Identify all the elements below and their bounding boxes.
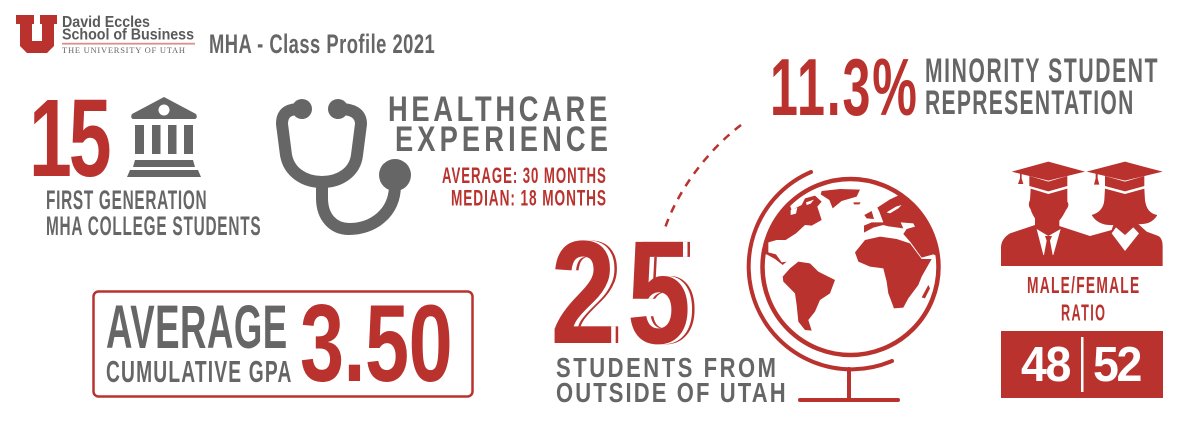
box outline	[94, 292, 472, 396]
label	[1027, 274, 1139, 325]
value 25 with offset outline: 5	[627, 210, 691, 374]
heading: HEALTHCARE	[388, 90, 607, 129]
arrow: dashed connector	[665, 125, 741, 228]
label: average: AVERAGE	[106, 292, 287, 361]
heading	[388, 90, 608, 159]
caption: MHA COLLEGE STUDENTS	[46, 211, 261, 241]
label: cumulative GPA: CUMULATIVE GPA	[106, 356, 291, 389]
icon: globe on stand	[749, 172, 950, 400]
icon: institution building	[127, 97, 201, 177]
label: RATIO	[1061, 299, 1105, 325]
ratio box: 52	[1093, 338, 1142, 392]
number 15: 15	[29, 78, 112, 200]
caption: OUTSIDE OF UTAH	[556, 378, 786, 409]
caption: FIRST GENERATION	[46, 185, 207, 215]
caption: STUDENTS FROM	[556, 353, 776, 384]
heading: EXPERIENCE	[395, 120, 608, 159]
value 25 with offset outline: 2	[550, 210, 616, 375]
icon: block U logo	[16, 15, 57, 53]
ratio box: 48	[1021, 338, 1071, 392]
logo wordmark: School of Business	[62, 27, 194, 44]
value 25 with offset outline: 5	[632, 210, 695, 374]
logo wordmark	[62, 15, 195, 55]
label: MALE/FEMALE	[1027, 274, 1139, 299]
value 25 with offset outline: 5	[634, 210, 698, 374]
page title: MHA - Class Profile 2021	[209, 28, 435, 59]
panel: average GPA	[94, 282, 472, 405]
continents	[766, 189, 936, 331]
logo wordmark: THE UNIVERSITY OF UTAH	[62, 45, 185, 55]
header: logo and title	[16, 15, 435, 59]
average and median months: MEDIAN: 18 MONTHS	[451, 185, 606, 210]
logo wordmark: David Eccles	[62, 15, 150, 31]
caption	[46, 185, 261, 241]
value 25 with offset outline: 2	[558, 210, 623, 375]
value 3.50: 3.50	[300, 282, 453, 405]
average and median months: AVERAGE: 30 MONTHS	[442, 164, 606, 188]
panel: healthcare experience	[282, 90, 608, 229]
label: MINORITY STUDENT	[925, 51, 1158, 89]
icon: stethoscope	[282, 99, 411, 229]
panel: students from outside Utah	[550, 172, 950, 409]
panel: male/female ratio	[1001, 162, 1163, 398]
caption	[556, 353, 786, 409]
ratio box	[1001, 331, 1163, 398]
label	[925, 51, 1158, 121]
panel: minority representation	[770, 43, 1158, 133]
value 25 with offset outline: 2	[555, 210, 620, 375]
average and median months	[442, 164, 606, 210]
panel: first generation students	[29, 78, 261, 241]
icon: male and female graduates	[1001, 162, 1163, 266]
label: REPRESENTATION	[925, 83, 1133, 121]
value 25 with offset outline	[550, 210, 698, 375]
value 11.3%: 11.3%	[770, 43, 917, 133]
